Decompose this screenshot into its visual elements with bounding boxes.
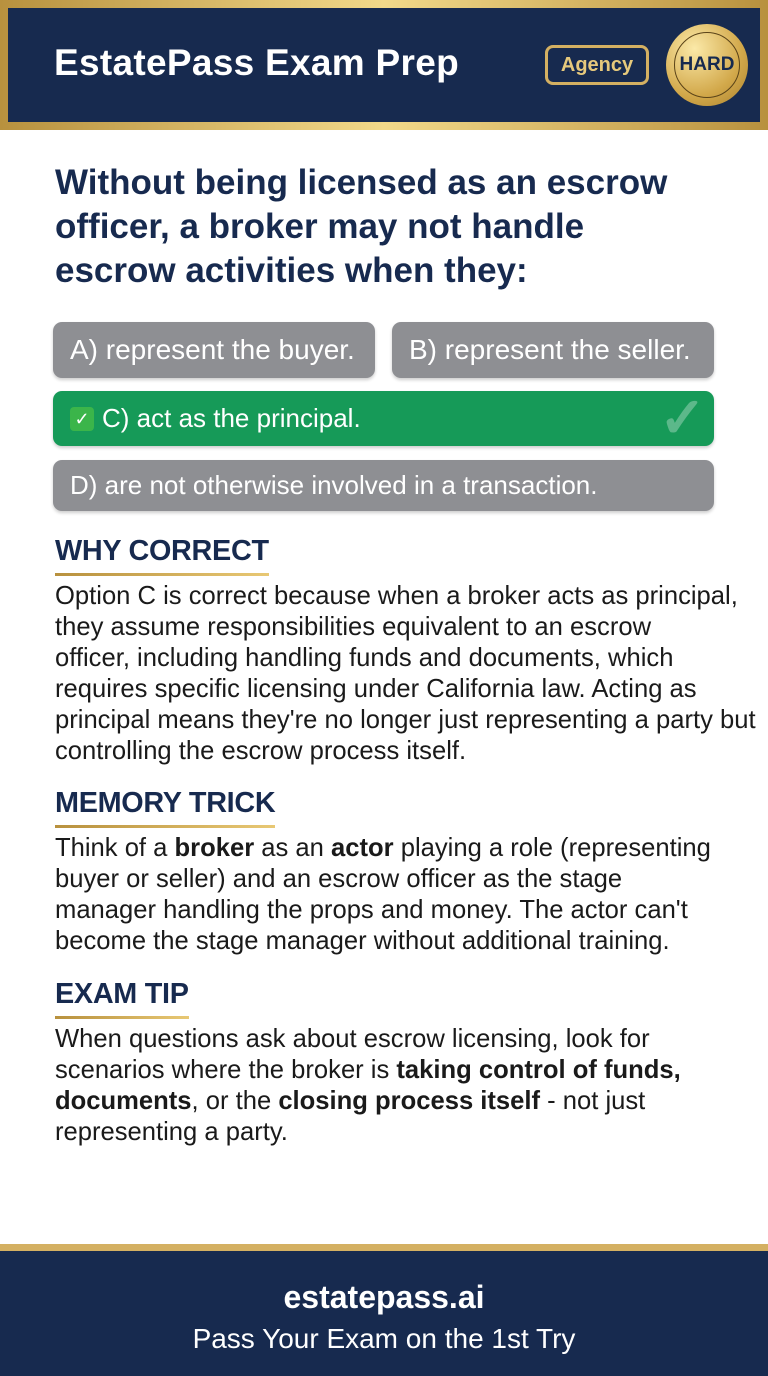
option C correct: ✓: [74, 408, 90, 428]
option D: [53, 460, 714, 511]
text: exam tip: documents, or the closing process itself - not just: [55, 1087, 645, 1115]
footer url: estatepass.ai: [283, 1279, 484, 1315]
badge: HARD seal: HARD: [680, 54, 734, 75]
icon: check mark: ✓: [659, 386, 706, 449]
option B: B) represent the seller.: [409, 334, 691, 365]
badge: HARD seal: [666, 24, 748, 106]
text: why correct: Option C is correct because when a broker acts as principal,: [55, 582, 738, 610]
text: memory trick: become the stage manager without additional training.: [55, 927, 670, 955]
text: exam tip: scenarios where the broker is taking control of funds,: [55, 1056, 681, 1084]
question: Without being licensed as an escrow: [55, 163, 667, 202]
text: exam tip: representing a party.: [55, 1118, 288, 1146]
option C correct: [53, 391, 714, 446]
badge: Agency: Agency: [561, 54, 633, 76]
option A: A) represent the buyer.: [70, 334, 355, 365]
option B: [392, 322, 714, 378]
text: why correct: controlling the escrow process itself.: [55, 737, 466, 765]
text: exam tip: When questions ask about escrow licensing, look for: [55, 1025, 650, 1053]
option C correct: C) act as the principal.: [102, 403, 361, 433]
heading: memory trick: MEMORY TRICK: [55, 787, 275, 819]
text: why correct: requires specific licensing under California law. Acting as: [55, 675, 697, 703]
header band: [0, 0, 768, 130]
question: officer, a broker may not handle: [55, 207, 584, 246]
text: why correct: officer, including handling funds and documents, which: [55, 644, 673, 672]
question: [55, 163, 668, 290]
title: EstatePass Exam Prep: [54, 42, 459, 83]
heading: exam tip: EXAM TIP: [55, 978, 189, 1010]
badge: Agency: [545, 45, 649, 85]
text: why correct: [55, 582, 756, 765]
option A: [53, 322, 375, 378]
question: escrow activities when they:: [55, 251, 528, 290]
text: why correct: they assume responsibilities equivalent to an escrow: [55, 613, 651, 641]
text: memory trick: manager handling the props and money. The actor can't: [55, 896, 688, 924]
heading: why correct: WHY CORRECT: [55, 535, 269, 567]
option D: D) are not otherwise involved in a transaction.: [70, 470, 598, 500]
footer tagline: Pass Your Exam on the 1st Try: [193, 1323, 575, 1354]
text: memory trick: Think of a broker as an actor playing a role (representing: [55, 834, 711, 862]
text: why correct: principal means they're no longer just representing a party but: [55, 706, 756, 734]
footer: [0, 1244, 768, 1376]
text: exam tip: [55, 1025, 681, 1146]
text: memory trick: buyer or seller) and an escrow officer as the stage: [55, 865, 622, 893]
text: memory trick: [55, 834, 711, 955]
